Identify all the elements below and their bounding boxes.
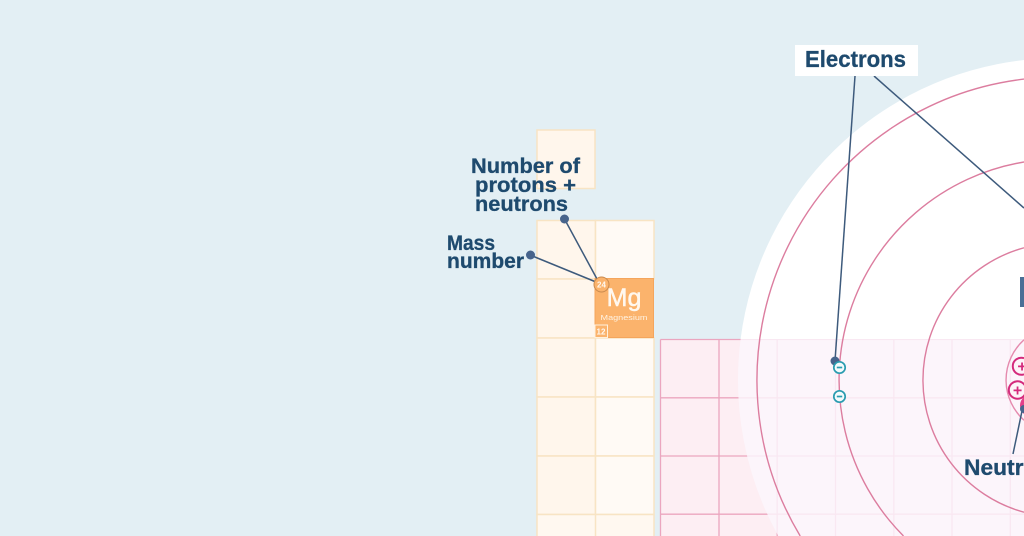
magnesium tile: Magnesium bbox=[600, 313, 648, 322]
atom: solid white halo above the table bbox=[741, 60, 1024, 339]
atom: nucleus particles bbox=[1009, 358, 1024, 414]
leader line dots bbox=[526, 214, 569, 260]
leader line: neutrons bbox=[1013, 405, 1024, 454]
label: mass number bbox=[447, 232, 524, 273]
label: number of protons + neutrons bbox=[471, 155, 581, 216]
label: mass number: Mass bbox=[447, 232, 495, 255]
label: number of protons + neutrons: protons + bbox=[475, 174, 576, 197]
label: mass number: number bbox=[447, 250, 524, 273]
leader lines: electrons bbox=[835, 76, 1024, 361]
periodic table: orange column cells bbox=[537, 130, 654, 536]
magnesium tile: 12 bbox=[597, 328, 606, 336]
atom: tinted halo over the table bbox=[738, 339, 1024, 536]
electrons on second orbit bbox=[834, 362, 845, 402]
leader lines: mass number bbox=[530, 219, 597, 282]
atom: nucleus particles: + bbox=[1013, 382, 1022, 400]
atom: electron orbits bbox=[757, 79, 1024, 536]
label: number of protons + neutrons: neutrons bbox=[475, 193, 568, 216]
electron marker dot bbox=[830, 356, 840, 366]
label: electrons: Electrons bbox=[805, 46, 906, 72]
periodic table: pink block bbox=[660, 340, 1024, 536]
label tag: protons, cut off at right edge bbox=[1020, 277, 1024, 307]
magnesium tile bbox=[595, 278, 654, 338]
mass number circle: 24 bbox=[597, 280, 606, 290]
mass number circle bbox=[594, 277, 609, 292]
magnesium tile: Mg bbox=[607, 284, 641, 312]
label: number of protons + neutrons: Number of bbox=[471, 155, 581, 178]
